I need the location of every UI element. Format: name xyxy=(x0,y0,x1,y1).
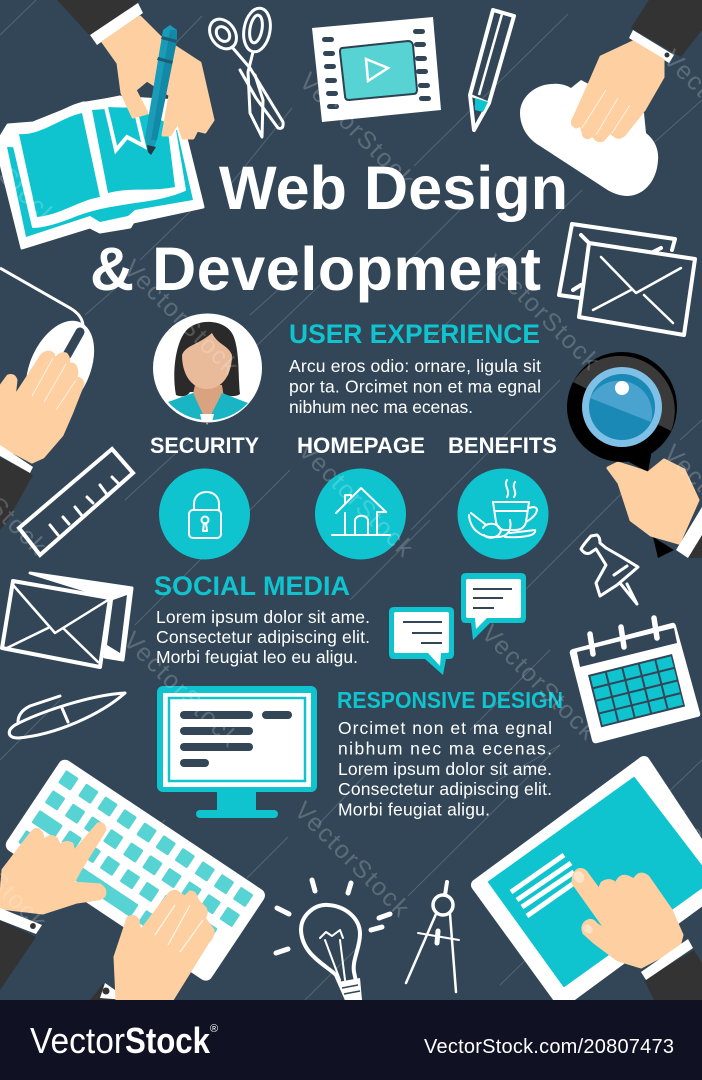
text block: social media: Morbi feugiat leo eu aligu. xyxy=(156,647,358,667)
icon: push pin xyxy=(581,535,638,604)
lens xyxy=(582,367,662,447)
text: VectorStock xyxy=(294,67,420,194)
cuff xyxy=(629,30,674,63)
icon: magnifier with hand xyxy=(567,352,702,558)
icon: monitor xyxy=(157,686,317,818)
icon: keyboard with hands xyxy=(0,757,268,1000)
left cuff xyxy=(0,908,42,934)
avatar: user portrait xyxy=(153,314,262,425)
text block: social media xyxy=(156,607,370,667)
book xyxy=(0,97,203,248)
sleeve xyxy=(644,950,702,1000)
hair xyxy=(174,322,240,396)
text: VectorStock xyxy=(289,796,415,923)
icon: chat bubble left xyxy=(389,607,454,675)
text block: social media: Consectetur adipiscing elit. xyxy=(156,627,370,647)
hand xyxy=(572,42,663,141)
footer image id: VectorStock.com/20807473 xyxy=(424,1036,674,1058)
cuff xyxy=(676,507,702,558)
icon: ruler xyxy=(19,449,133,555)
text block: responsive design: Lorem ipsum dolor sit ame. xyxy=(338,759,552,779)
text block: responsive design: Morbi feugiat aligu. xyxy=(338,800,490,820)
magnifier frame xyxy=(567,352,677,462)
icon: light bulb xyxy=(276,880,390,1000)
right hand xyxy=(115,891,213,1000)
label: HOMEPAGE: HOMEPAGE xyxy=(297,433,425,458)
text: VectorStock xyxy=(118,626,244,753)
cuff xyxy=(0,445,33,473)
footer logo: VectorStock xyxy=(30,1020,223,1061)
light rays xyxy=(276,880,390,953)
left sleeve xyxy=(0,920,36,990)
cuff xyxy=(641,939,693,980)
text block: user experience: Arcu eros odio: ornare, ligula sit xyxy=(289,356,541,376)
icon: benefits coffee xyxy=(458,468,548,560)
text block: responsive design: Orcimet non et ma egnal xyxy=(338,718,552,738)
icon: scissors xyxy=(204,6,283,137)
heading: USER EXPERIENCE: USER EXPERIENCE xyxy=(289,319,540,349)
icon: envelopes top right xyxy=(559,224,695,335)
screen xyxy=(489,778,702,986)
text block: responsive design: Consectetur adipiscing elit. xyxy=(338,779,552,799)
icon: calendar xyxy=(571,618,699,742)
text block: user experience: nibhum nec ma ecenas. xyxy=(289,397,473,417)
keyboard xyxy=(3,757,268,983)
hand xyxy=(573,870,682,967)
text block: social media: Lorem ipsum dolor sit ame. xyxy=(156,607,370,627)
text lines on screen xyxy=(511,855,574,916)
label: BENEFITS: BENEFITS xyxy=(448,433,557,458)
title: Web Design & Development: Web Design xyxy=(219,154,568,222)
icon: ink pen xyxy=(9,693,125,738)
pen xyxy=(145,25,177,155)
hand xyxy=(103,17,213,138)
icon: drawing compass xyxy=(406,882,459,992)
suit sleeve xyxy=(57,0,140,38)
icon: homepage house xyxy=(315,468,406,560)
text block: user experience xyxy=(289,356,541,417)
text block: responsive design xyxy=(338,718,552,820)
heading: RESPONSIVE DESIGN: RESPONSIVE DESIGN xyxy=(337,687,563,713)
heading: SOCIAL MEDIA: SOCIAL MEDIA xyxy=(154,571,350,601)
cable xyxy=(0,268,83,325)
text: VectorStock xyxy=(479,249,605,376)
lower handle xyxy=(653,537,674,558)
sleeve xyxy=(0,457,33,530)
sleeve xyxy=(631,0,702,57)
hand xyxy=(0,352,83,462)
footer logo: ® xyxy=(210,1023,218,1035)
title: Web Design & Development xyxy=(90,154,568,303)
right sleeve xyxy=(90,984,125,1000)
icon: chat bubble right xyxy=(461,573,526,640)
left hand xyxy=(0,824,105,913)
title: Web Design & Development: & Development xyxy=(90,235,541,303)
icon: security lock xyxy=(159,468,250,560)
icon: tablet with hand xyxy=(477,762,702,1002)
icon: envelopes left xyxy=(2,573,132,667)
mouse xyxy=(12,310,108,426)
text block: user experience: por ta. Orcimet non et ma egnal xyxy=(289,376,541,396)
face xyxy=(182,333,232,389)
text: VectorStock xyxy=(118,254,244,381)
icon: film frame xyxy=(312,17,441,122)
jacket xyxy=(168,393,248,423)
icon: cloud with hand xyxy=(520,0,702,196)
icon: pencil xyxy=(470,10,514,130)
label: SECURITY: SECURITY xyxy=(150,433,259,458)
hand xyxy=(608,460,698,543)
cuff xyxy=(90,3,143,45)
text: VectorStock xyxy=(293,436,419,563)
footer bar xyxy=(0,1000,702,1080)
icon: book with hand and pen xyxy=(0,0,213,248)
cloud xyxy=(520,80,658,196)
neck xyxy=(192,385,224,425)
text block: responsive design: nibhum nec ma ecenas. xyxy=(338,738,552,758)
text: VectorStock xyxy=(476,619,602,746)
tablet xyxy=(477,762,702,1002)
icon: mouse with hand xyxy=(0,268,108,530)
